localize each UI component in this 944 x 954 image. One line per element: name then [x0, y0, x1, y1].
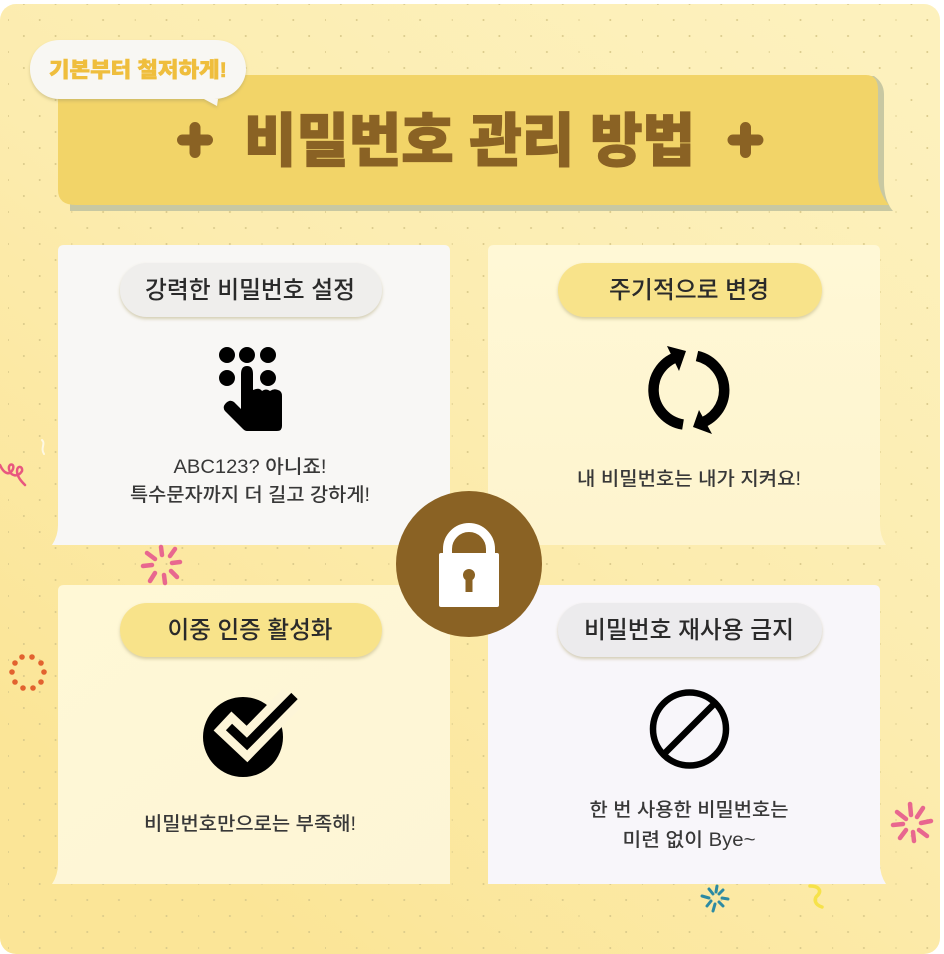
pill heading	[120, 603, 382, 657]
description text: 한 번 사용한 비밀번호는	[590, 799, 788, 821]
icon: hand tapping keypad	[219, 347, 282, 431]
pill heading: 비밀번호 재사용 금지	[584, 617, 794, 644]
decoration: pink burst	[143, 547, 180, 583]
pill heading: 이중 인증 활성화	[168, 617, 332, 644]
decoration: teal burst	[702, 886, 728, 911]
pill heading	[558, 263, 822, 317]
plus icon left	[182, 128, 208, 152]
decoration: pink burst right	[893, 804, 931, 841]
decoration: orange dotted ring	[9, 654, 47, 691]
description text: 미련 없이 Bye~	[622, 829, 756, 851]
card background	[488, 585, 886, 884]
panel: two factor authentication	[52, 585, 450, 884]
description text: ABC123? 아니죠!	[174, 456, 326, 478]
banner shadow	[70, 76, 893, 211]
description text: 비밀번호만으로는 부족해!	[144, 813, 356, 835]
card background	[488, 245, 886, 545]
panel: change regularly	[488, 245, 886, 545]
title text: 비밀번호 관리 방법	[244, 109, 695, 174]
description text: 내 비밀번호는 내가 지켜요!	[577, 468, 801, 490]
description text	[130, 456, 370, 506]
banner plate	[58, 75, 889, 205]
decoration: yellow squiggle	[810, 886, 822, 907]
pill heading: 강력한 비밀번호 설정	[145, 277, 355, 304]
speech bubble tag	[30, 40, 246, 106]
description text: 특수문자까지 더 길고 강하게!	[130, 484, 370, 506]
center lock badge	[396, 491, 542, 637]
pill heading: 주기적으로 변경	[609, 277, 769, 304]
card background	[52, 245, 450, 545]
panel: no password reuse	[488, 585, 886, 884]
icon: refresh arrows	[654, 346, 724, 434]
panel: strong password	[52, 245, 450, 545]
pill heading	[120, 263, 382, 317]
icon: padlock	[439, 528, 499, 607]
description text	[590, 799, 788, 851]
icon: prohibited sign	[653, 692, 726, 766]
card background	[52, 585, 450, 884]
title banner	[58, 75, 893, 211]
decoration: faint white squiggle	[42, 440, 44, 454]
pill heading	[558, 603, 822, 657]
plus icon right	[733, 128, 758, 152]
icon: check mark in circle	[203, 696, 294, 777]
bubble text: 기본부터 철저하게!	[49, 59, 227, 82]
bubble shape	[30, 40, 246, 106]
decoration: pink squiggle	[0, 464, 25, 485]
